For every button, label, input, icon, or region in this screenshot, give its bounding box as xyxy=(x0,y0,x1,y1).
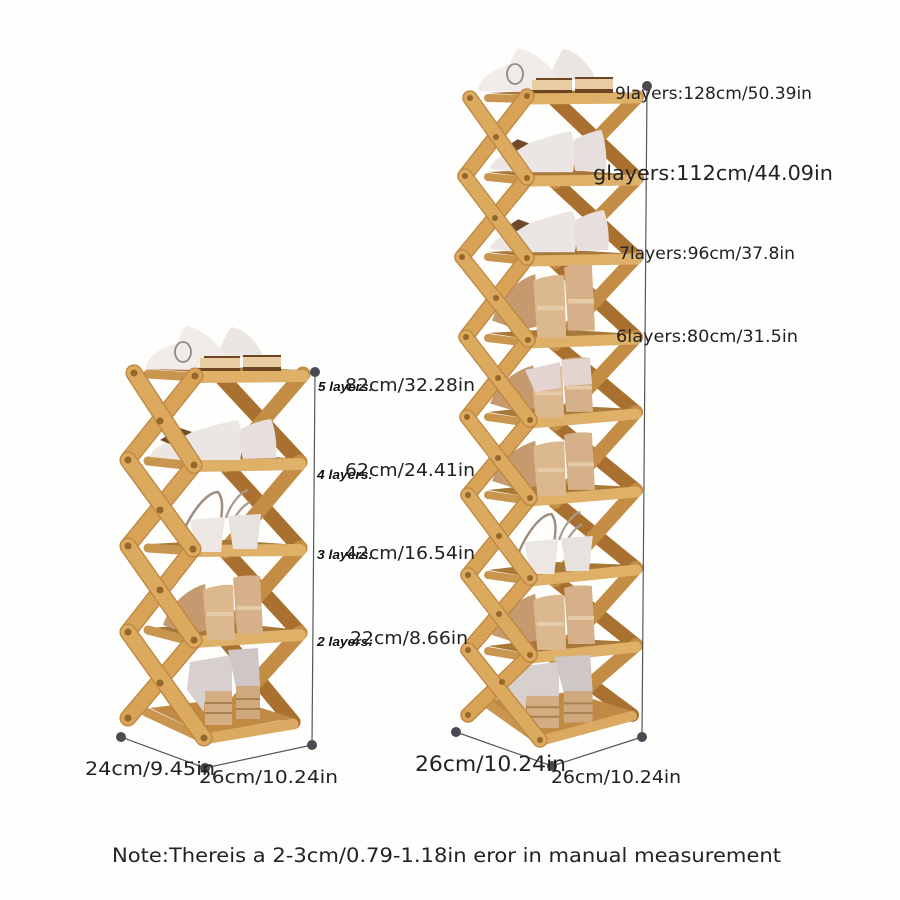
left rack shelves xyxy=(146,367,303,739)
left rack front legs xyxy=(128,373,204,738)
left rack layer labels: 42cm/16.54in xyxy=(345,543,475,564)
left rack back legs xyxy=(222,374,303,722)
left rack layer labels: 2 layers: xyxy=(316,635,373,649)
right rack layer labels: 9layers:128cm/50.39in xyxy=(615,84,812,103)
left rack pivots xyxy=(124,370,208,742)
left rack shoes xyxy=(146,326,281,725)
right rack dimension lines xyxy=(451,81,652,771)
left rack layer labels xyxy=(316,375,475,649)
right rack layer labels: 7layers:96cm/37.8in xyxy=(619,244,795,263)
left rack layer labels: 4 layers: xyxy=(316,468,373,482)
left rack layer labels: 82cm/32.28in xyxy=(345,375,475,396)
pink uppers on layer five shoes xyxy=(525,358,592,392)
left rack dimension lines xyxy=(116,367,320,773)
note: Note:Thereis a 2-3cm/0.79-1.18in eror in manual measurement xyxy=(112,844,781,867)
footprint labels: 26cm/10.24in xyxy=(199,767,338,788)
right rack: 9 layers xyxy=(459,48,637,743)
right rack shoes xyxy=(478,48,613,728)
left rack layer labels: 5 layers: xyxy=(318,380,373,394)
left rack layer labels: 3 layers: xyxy=(317,548,373,562)
footprint labels: 26cm/10.24in xyxy=(415,752,566,776)
right rack layer labels: glayers:112cm/44.09in xyxy=(593,161,833,185)
left rack layer labels: 22cm/8.66in xyxy=(350,628,468,649)
footprint labels: 24cm/9.45in xyxy=(85,758,215,780)
right rack layer labels xyxy=(593,84,833,346)
right rack shelves xyxy=(485,90,637,741)
left rack layer labels: 62cm/24.41in xyxy=(345,460,475,481)
right rack pivots xyxy=(459,93,543,743)
right rack layer labels: 6layers:80cm/31.5in xyxy=(616,327,798,346)
right rack front legs xyxy=(462,96,540,740)
right rack back legs xyxy=(555,97,637,715)
footprint labels xyxy=(85,752,681,788)
footprint labels: 26cm/10.24in xyxy=(551,768,681,788)
left rack: 5 layers xyxy=(124,326,303,742)
